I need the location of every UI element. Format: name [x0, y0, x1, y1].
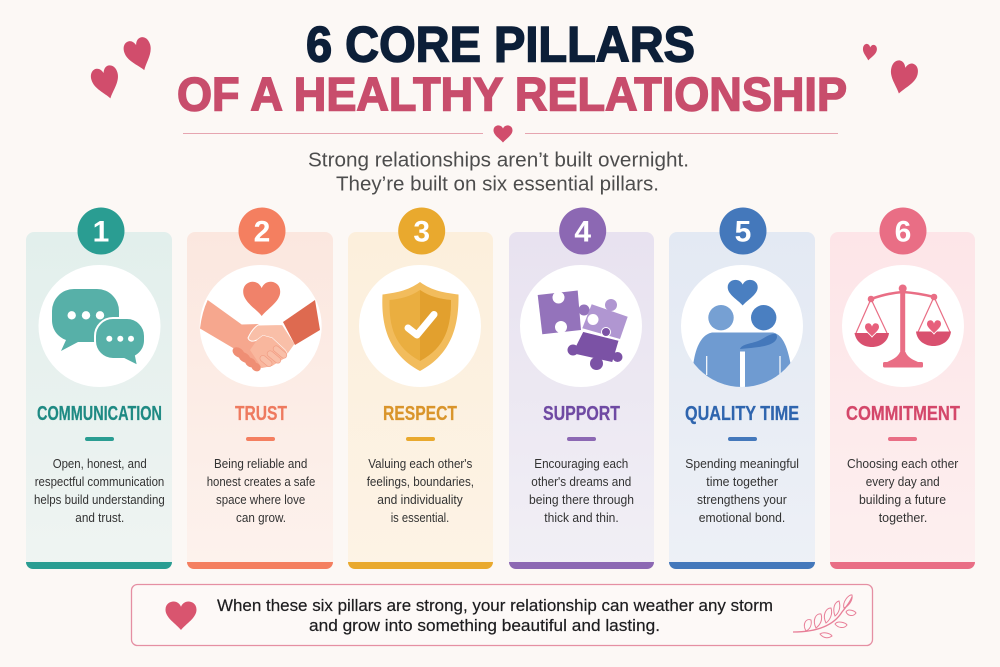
- callout: [132, 584, 872, 646]
- icon: shield with check: [382, 282, 459, 371]
- text: respect description: and individuality: [377, 493, 463, 507]
- number badge 1: 1: [93, 216, 109, 248]
- text: trust description: Being reliable and: [214, 457, 307, 471]
- number badge 3: [398, 208, 445, 254]
- text: quality time description: time together: [706, 475, 778, 489]
- text: support description: other's dreams and: [531, 475, 631, 489]
- text: quality time description: strengthens your: [697, 493, 787, 507]
- icon: leaf sprig: [793, 595, 856, 638]
- number badge 4: [559, 208, 606, 254]
- text: support description: Encouraging each: [534, 457, 628, 471]
- text: communication description: [34, 457, 165, 525]
- text: trust description: [207, 457, 315, 525]
- text: respect description: is essential.: [391, 511, 449, 525]
- icon: puzzle pieces: [538, 290, 628, 370]
- divider with heart: [183, 125, 838, 142]
- number badge 2: 2: [254, 216, 270, 248]
- text: quality time description: Spending meaningful: [685, 457, 799, 471]
- text: respect description: Valuing each other's: [368, 457, 472, 471]
- text: communication description: respectful communication: [35, 475, 164, 489]
- panel: respect: [348, 208, 493, 569]
- text: trust description: honest creates a safe: [207, 475, 315, 489]
- heading: support: SUPPORT: [543, 403, 620, 425]
- number badge 5: 5: [735, 216, 751, 248]
- text: support description: being there through: [529, 493, 634, 507]
- text: quality time description: [685, 457, 799, 525]
- heading: trust: TRUST: [235, 403, 287, 425]
- heading: quality time: QUALITY TIME: [685, 403, 799, 425]
- icon: speech bubbles: [52, 289, 145, 366]
- icon: balance scale with hearts: [854, 284, 951, 368]
- title: OF A HEALTHY RELATIONSHIP: [177, 68, 847, 122]
- text: commitment description: Choosing each other: [847, 457, 958, 471]
- panel: trust: [187, 208, 333, 569]
- subtitle: They’re built on six essential pillars.: [336, 174, 659, 196]
- number badge 4: 4: [574, 216, 591, 248]
- text: support description: [529, 457, 634, 525]
- text: commitment description: building a future: [859, 493, 946, 507]
- number badge 5: [720, 208, 766, 254]
- text: commitment description: together.: [879, 511, 927, 525]
- icon: handshake and heart: [200, 282, 320, 373]
- number badge 6: [880, 208, 926, 254]
- text: commitment description: every day and: [866, 475, 940, 489]
- heading: respect: RESPECT: [383, 403, 457, 425]
- title: 6 CORE PILLARS: [306, 16, 695, 72]
- number badge 2: [238, 208, 286, 254]
- text: communication description: Open, honest, and: [53, 457, 147, 471]
- icon: embracing couple and heart: [694, 280, 790, 387]
- text: callout message: When these six pillars are strong, your relationship can weather any storm: [217, 596, 773, 615]
- panel: communication: [26, 208, 172, 569]
- text: respect description: [367, 457, 474, 525]
- text: callout message: [217, 596, 773, 635]
- text: trust description: space where love: [216, 493, 305, 507]
- text: respect description: feelings, boundaries,: [367, 475, 474, 489]
- heading: commitment: COMMITMENT: [846, 403, 960, 425]
- subtitle: Strong relationships aren’t built overnight.: [308, 150, 689, 172]
- decorative hearts: [89, 35, 920, 102]
- icon: callout heart: [166, 602, 196, 630]
- panel: commitment: [830, 208, 975, 569]
- panel: quality time: [669, 208, 815, 569]
- text: quality time description: emotional bond.: [699, 511, 785, 525]
- text: commitment description: [847, 457, 958, 525]
- text: trust description: can grow.: [236, 511, 286, 525]
- text: communication description: and trust.: [75, 511, 124, 525]
- number badge 6: 6: [895, 216, 911, 248]
- title: [177, 16, 847, 122]
- heading: communication: COMMUNICATION: [37, 403, 162, 425]
- text: communication description: helps build understanding: [34, 493, 165, 507]
- subtitle: [308, 150, 689, 196]
- text: callout message: and grow into something beautiful and lasting.: [309, 616, 660, 635]
- number badge 3: 3: [413, 216, 430, 248]
- panel: support: [509, 208, 654, 569]
- text: support description: thick and thin.: [544, 511, 619, 525]
- number badge 1: [78, 208, 124, 254]
